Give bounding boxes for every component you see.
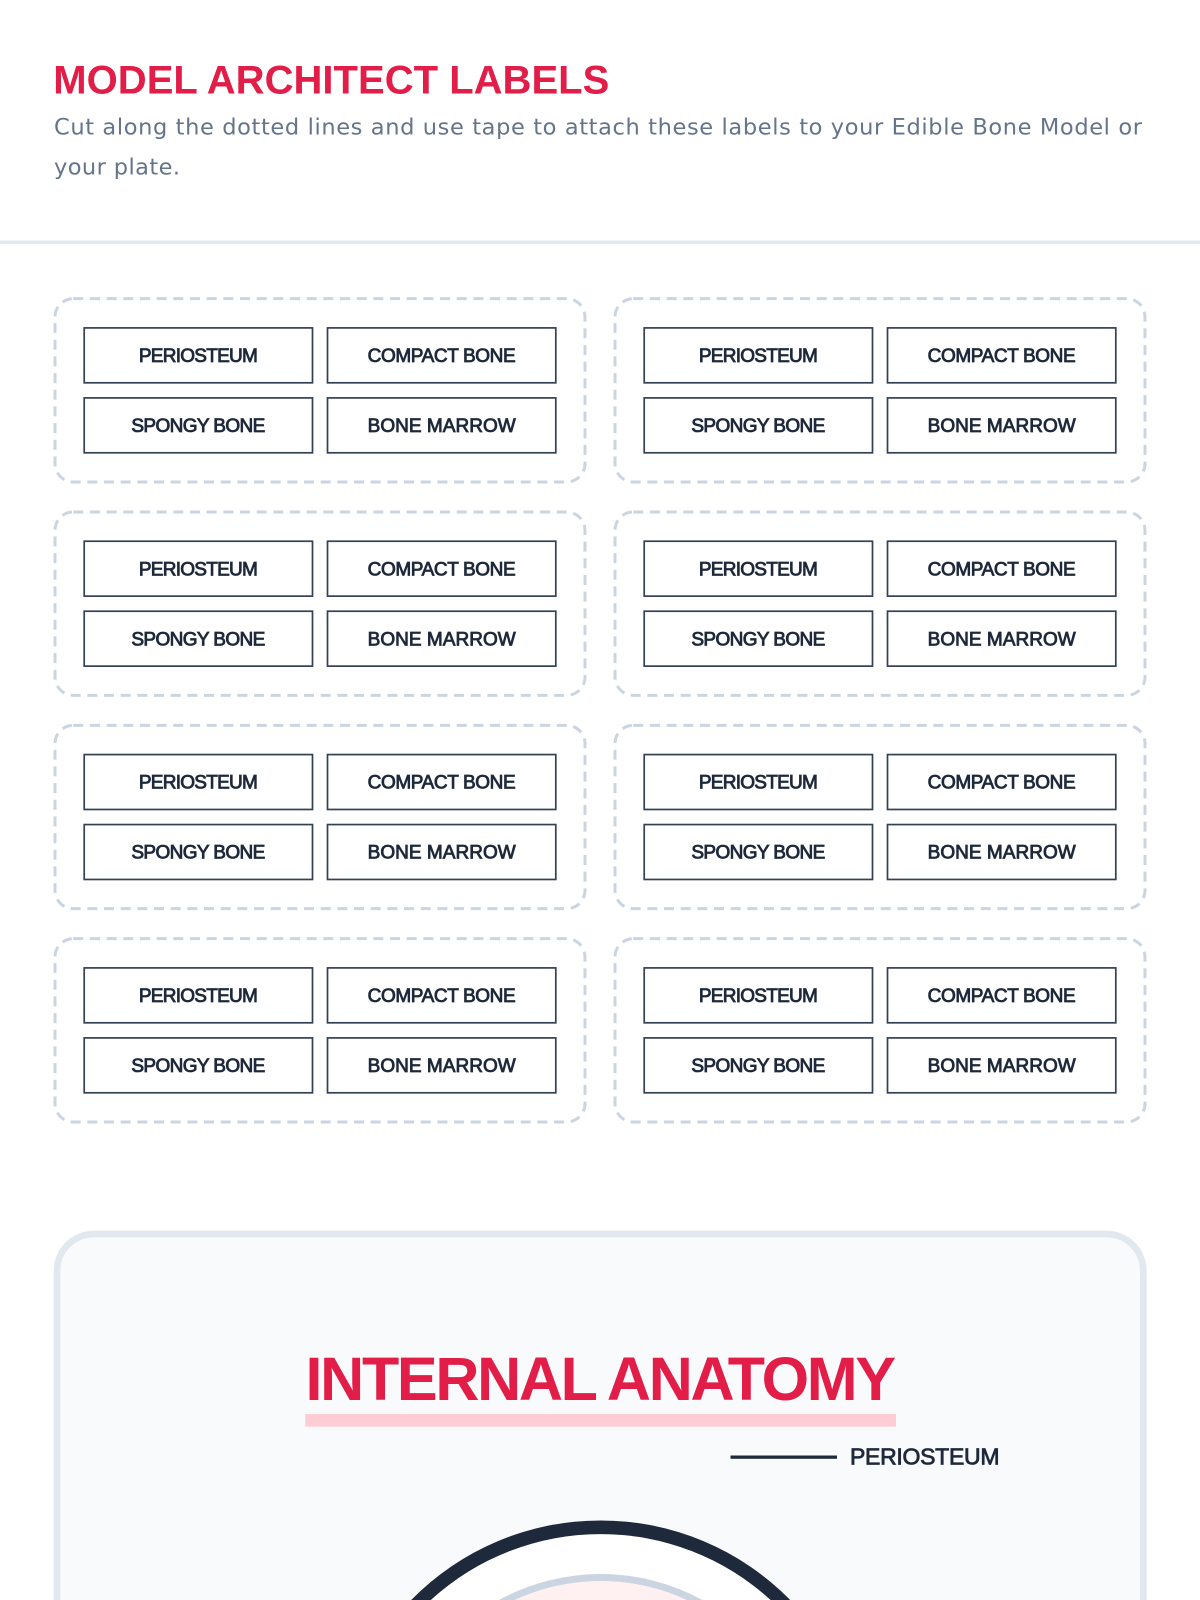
label: compact bone: [328, 541, 556, 596]
label: spongy bone: [644, 398, 872, 453]
heading underline: [305, 1414, 896, 1427]
label: compact bone: COMPACT BONE: [368, 346, 516, 367]
leader line: periosteum: [730, 1456, 837, 1459]
label: periosteum: [644, 541, 872, 596]
label: compact bone: COMPACT BONE: [368, 986, 516, 1007]
label: spongy bone: SPONGY BONE: [131, 629, 265, 650]
label: bone marrow: BONE MARROW: [928, 416, 1076, 437]
title: MODEL ARCHITECT LABELS: [53, 58, 609, 102]
label: periosteum: PERIOSTEUM: [139, 559, 258, 580]
label: periosteum: PERIOSTEUM: [699, 773, 818, 794]
label: periosteum: [84, 328, 312, 383]
label: spongy bone: [644, 1038, 872, 1093]
label: periosteum: PERIOSTEUM: [699, 559, 818, 580]
label card: row 4 left: [55, 939, 585, 1122]
label: bone marrow: [888, 611, 1116, 666]
label: spongy bone: [84, 825, 312, 879]
label: periosteum: [84, 755, 312, 809]
label card: row 3 left: [55, 725, 585, 909]
callout label: periosteum: PERIOSTEUM: [850, 1444, 1000, 1470]
heading: internal anatomy: INTERNAL ANATOMY: [306, 1345, 896, 1413]
label: spongy bone: [84, 611, 312, 666]
label: periosteum: [644, 968, 872, 1023]
label: periosteum: PERIOSTEUM: [139, 346, 258, 367]
label card: row 2 left: [55, 512, 585, 695]
label: spongy bone: [644, 611, 872, 666]
label: periosteum: [644, 755, 872, 809]
label: compact bone: [328, 328, 556, 383]
header: [53, 58, 1143, 180]
label: bone marrow: [328, 611, 556, 666]
label: compact bone: [888, 755, 1116, 809]
label: compact bone: [888, 541, 1116, 596]
label: compact bone: COMPACT BONE: [928, 773, 1076, 794]
label: bone marrow: [328, 1038, 556, 1093]
label: bone marrow: BONE MARROW: [368, 843, 516, 864]
label: bone marrow: BONE MARROW: [368, 629, 516, 650]
label: bone marrow: [888, 1038, 1116, 1093]
label: bone marrow: [328, 825, 556, 879]
label: bone marrow: BONE MARROW: [928, 629, 1076, 650]
label: compact bone: COMPACT BONE: [368, 559, 516, 580]
subtitle: Cut along the dotted lines and use tape to attach these labels to your Edible Bone Model or: [54, 114, 1143, 140]
label card: row 1 left: [55, 299, 585, 482]
label: periosteum: PERIOSTEUM: [699, 986, 818, 1007]
label: spongy bone: [84, 1038, 312, 1093]
label: spongy bone: SPONGY BONE: [691, 416, 825, 437]
label: bone marrow: BONE MARROW: [368, 1056, 516, 1077]
label: compact bone: COMPACT BONE: [928, 346, 1076, 367]
label: bone marrow: [888, 398, 1116, 453]
label: bone marrow: [888, 825, 1116, 879]
label: spongy bone: SPONGY BONE: [691, 1056, 825, 1077]
label: compact bone: [328, 968, 556, 1023]
label card: row 2 right: [615, 512, 1145, 695]
diagram: bone cross-section: [411, 1520, 790, 1600]
label: spongy bone: SPONGY BONE: [691, 629, 825, 650]
label: bone marrow: [328, 398, 556, 453]
label: compact bone: COMPACT BONE: [928, 986, 1076, 1007]
label: bone marrow: BONE MARROW: [928, 1056, 1076, 1077]
label: compact bone: [328, 755, 556, 809]
label: spongy bone: SPONGY BONE: [131, 1056, 265, 1077]
label: spongy bone: SPONGY BONE: [131, 416, 265, 437]
label: periosteum: PERIOSTEUM: [699, 346, 818, 367]
label: bone marrow: BONE MARROW: [928, 843, 1076, 864]
label: spongy bone: [84, 398, 312, 453]
label: periosteum: [644, 328, 872, 383]
label: spongy bone: [644, 825, 872, 879]
label: compact bone: COMPACT BONE: [928, 559, 1076, 580]
label: compact bone: COMPACT BONE: [368, 773, 516, 794]
label: periosteum: [84, 968, 312, 1023]
panel: internal anatomy: [57, 1234, 1143, 1600]
label: spongy bone: SPONGY BONE: [691, 843, 825, 864]
label: spongy bone: SPONGY BONE: [131, 843, 265, 864]
label: periosteum: [84, 541, 312, 596]
label card: row 4 right: [615, 939, 1145, 1122]
subtitle: your plate.: [54, 154, 180, 180]
label: periosteum: PERIOSTEUM: [139, 773, 258, 794]
label: compact bone: [888, 968, 1116, 1023]
label: compact bone: [888, 328, 1116, 383]
label card: row 3 right: [615, 725, 1145, 909]
label card: row 1 right: [615, 299, 1145, 482]
label: periosteum: PERIOSTEUM: [139, 986, 258, 1007]
label: bone marrow: BONE MARROW: [368, 416, 516, 437]
